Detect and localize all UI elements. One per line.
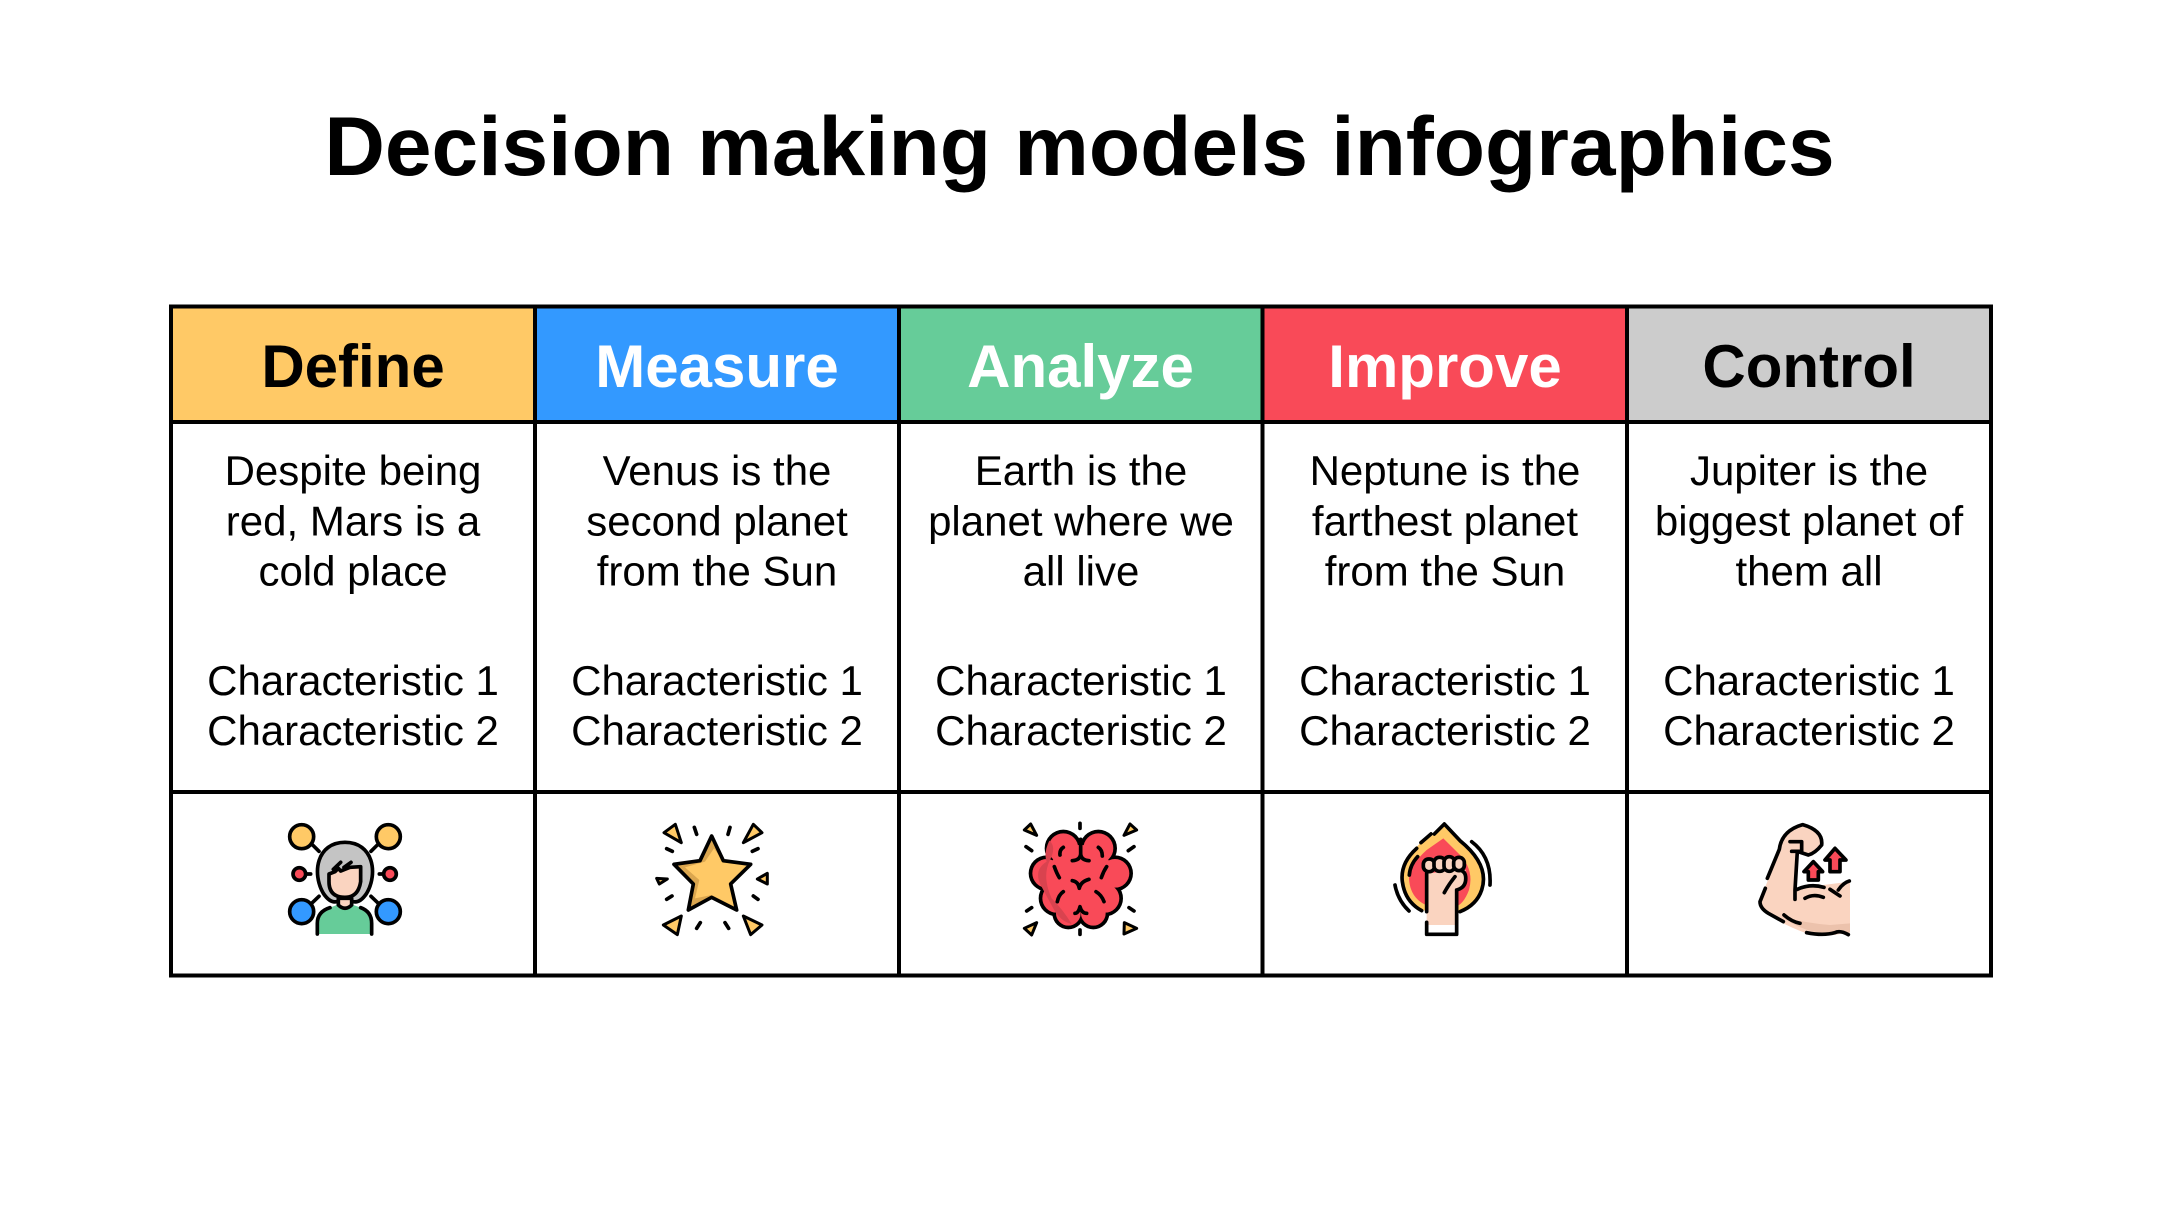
text: Control description xyxy=(1655,447,1963,594)
icon: raised fist with flame xyxy=(1395,824,1490,934)
header: Improve: Improve xyxy=(1328,333,1562,400)
text: Control description: Jupiter is the xyxy=(1690,447,1928,494)
text: Measure description: second planet xyxy=(586,498,848,544)
text: Analyze characteristics: Characteristic 2 xyxy=(935,707,1227,754)
text: Analyze description: all live xyxy=(1023,548,1139,594)
text: Define description xyxy=(225,447,481,594)
text: Analyze description xyxy=(928,447,1234,594)
text: Control characteristics: Characteristic 1 xyxy=(1663,657,1955,704)
header: Analyze xyxy=(899,306,1263,422)
text: Analyze characteristics: Characteristic 1 xyxy=(935,657,1227,704)
header: Analyze: Analyze xyxy=(967,333,1194,400)
icon: person with connected nodes xyxy=(290,825,400,934)
header: Control: Control xyxy=(1702,333,1916,400)
text: Improve description: Neptune is the xyxy=(1310,447,1580,494)
text: Define description: Despite being xyxy=(225,447,481,494)
header: Measure: Measure xyxy=(595,333,839,400)
text: Measure description: Venus is the xyxy=(603,447,831,494)
text: Improve description: from the Sun xyxy=(1325,548,1565,594)
text: Define description: cold place xyxy=(258,548,448,594)
text: Define description: red, Mars is a xyxy=(226,498,481,544)
text: Improve description: farthest planet xyxy=(1312,498,1578,544)
text: Define characteristics: Characteristic 2 xyxy=(207,707,499,754)
header: Measure xyxy=(535,306,899,422)
header: Define: Define xyxy=(261,333,445,400)
text: Analyze description: planet where we xyxy=(928,498,1234,544)
text: Control characteristics xyxy=(1663,657,1955,754)
text: Improve description xyxy=(1310,447,1580,594)
header: Control xyxy=(1627,306,1991,422)
icon: red brain with sparkles xyxy=(1024,823,1137,935)
text: Improve characteristics xyxy=(1299,657,1591,754)
text: Measure characteristics: Characteristic 1 xyxy=(571,657,863,704)
text: Measure characteristics xyxy=(571,657,863,754)
text: Improve characteristics: Characteristic 1 xyxy=(1299,657,1591,704)
icon: flexed arm with up arrows xyxy=(1760,824,1850,935)
text: Control characteristics: Characteristic 2 xyxy=(1663,707,1955,754)
table xyxy=(169,305,1993,977)
text: Measure description: from the Sun xyxy=(597,548,837,594)
title: Decision making models infographics xyxy=(324,99,1835,193)
text: Measure description xyxy=(586,447,848,594)
text: Control description: them all xyxy=(1735,548,1883,594)
header: Define xyxy=(171,306,535,422)
text: Control description: biggest planet of xyxy=(1655,498,1963,544)
text: Define characteristics xyxy=(207,657,499,754)
text: Define characteristics: Characteristic 1 xyxy=(207,657,499,704)
icon: star with sparkles xyxy=(657,824,767,935)
text: Measure characteristics: Characteristic 2 xyxy=(571,707,863,754)
text: Analyze characteristics xyxy=(935,657,1227,754)
text: Analyze description: Earth is the xyxy=(975,447,1187,494)
text: Improve characteristics: Characteristic 2 xyxy=(1299,707,1591,754)
header: Improve xyxy=(1263,306,1627,422)
